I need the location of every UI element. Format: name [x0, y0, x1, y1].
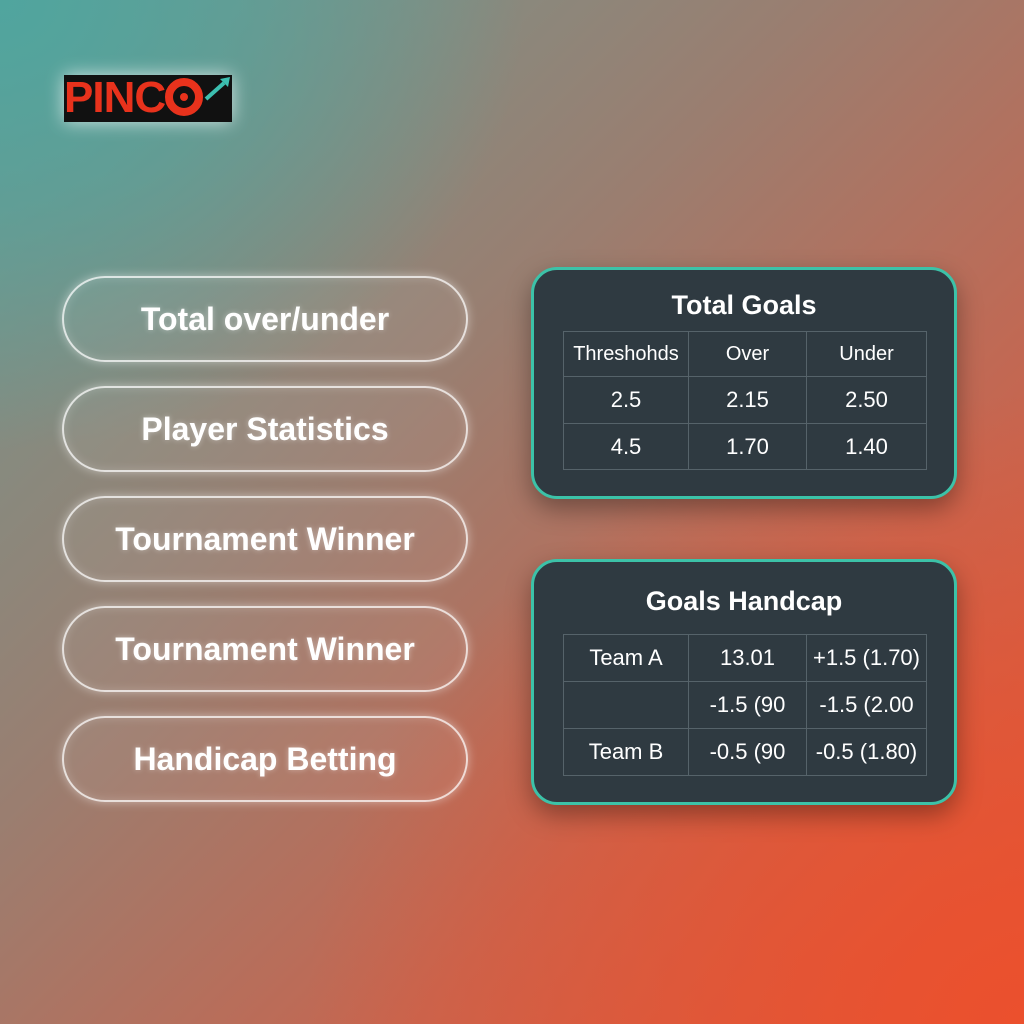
table: goals handicap: 13.01 — [720, 645, 775, 670]
table: total goals: 2.50 — [845, 387, 888, 412]
pill: tournament winner 2 — [62, 606, 468, 692]
table: total goals: 2.5 — [611, 387, 641, 412]
pill: handicap betting — [62, 716, 468, 802]
table: total goals: 4.5 — [611, 434, 641, 458]
pill: player statistics: Player Statistics — [141, 410, 389, 446]
panel: total goals — [531, 267, 957, 499]
table: goals handicap: Team A — [589, 645, 663, 670]
table: total goals: Under — [839, 342, 894, 364]
heading: total goals: Total Goals — [671, 290, 817, 320]
pill: tournament winner — [62, 496, 468, 582]
pill: tournament winner: Tournament Winner — [115, 520, 415, 556]
logo — [64, 75, 232, 122]
table: total goals: Over — [726, 342, 769, 364]
table: goals handicap: -1.5 (90 — [710, 692, 785, 717]
pill: total over/under — [62, 276, 468, 362]
heading: goals handicap: Goals Handcap — [646, 586, 842, 616]
table: goals handicap — [563, 634, 927, 776]
table: total goals: 1.40 — [845, 434, 888, 458]
table: goals handicap: +1.5 (1.70) — [813, 645, 920, 670]
pill: player statistics — [62, 386, 468, 472]
pill: handicap betting: Handicap Betting — [133, 740, 397, 776]
panel: goals handicap — [531, 559, 957, 805]
table: total goals: Threshohds — [573, 342, 679, 364]
table: goals handicap: -0.5 (90 — [710, 739, 785, 764]
pill: total over/under: Total over/under — [141, 300, 389, 336]
pill: tournament winner 2: Tournament Winner — [115, 630, 415, 666]
table: total goals — [563, 331, 927, 470]
logo: PINC — [64, 73, 165, 122]
table: goals handicap: Team B — [589, 739, 663, 764]
table: goals handicap: -1.5 (2.00 — [819, 692, 914, 717]
table: total goals: 2.15 — [726, 387, 769, 412]
table: total goals: 1.70 — [726, 434, 769, 458]
table: goals handicap: -0.5 (1.80) — [816, 739, 917, 764]
